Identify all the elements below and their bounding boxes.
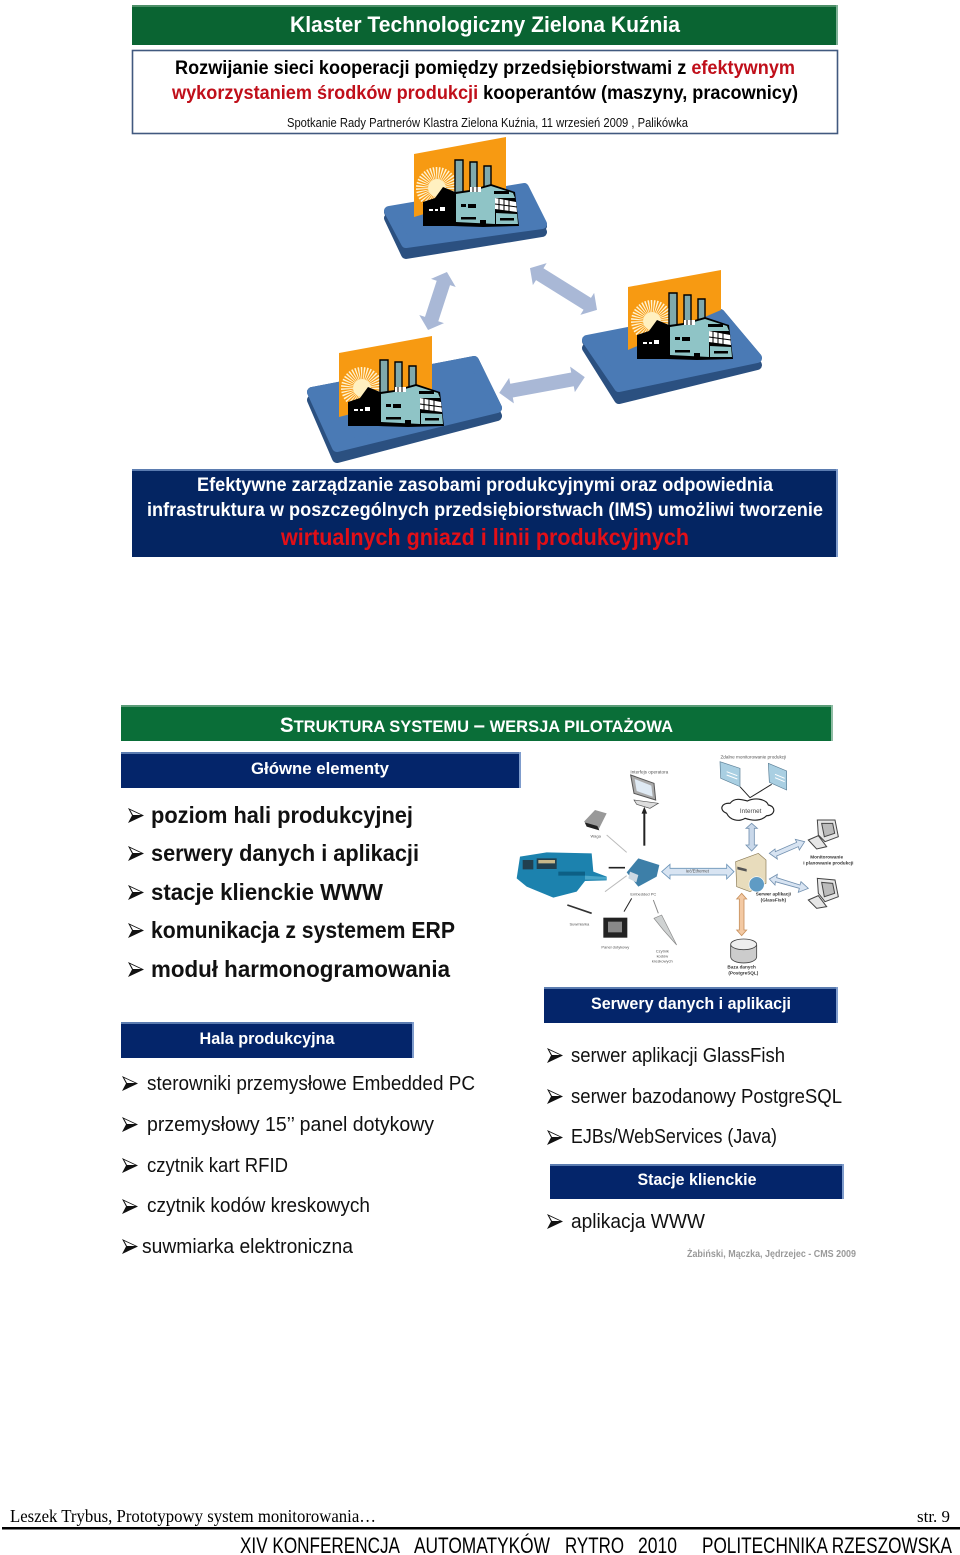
diagram labels: (GlassFish): [761, 898, 786, 903]
diagram labels: kreskowych: [652, 958, 673, 963]
list: main elements: stacje klienckie WWW: [151, 879, 384, 905]
database link: [737, 893, 747, 936]
diagram labels: Serwer aplikacji: [756, 891, 791, 896]
footer author: Leszek Trybus, Prototypowy system monitorowania…: [10, 1506, 376, 1526]
summary line 1: Efektywne zarządzanie zasobami produkcyjnymi oraz odpowiednia: [197, 474, 773, 496]
diagram labels: Panel dotykowy: [601, 944, 629, 949]
cloud: [722, 799, 774, 820]
list: servers: serwer aplikacji GlassFish: [571, 1045, 785, 1067]
list: client stations: aplikacja WWW: [571, 1211, 705, 1233]
diagram labels: kodów: [657, 953, 668, 958]
summary line 2: infrastruktura w poszczególnych przedsiębiorstwach (IMS) umożliwi tworzenie: [147, 499, 823, 521]
title bar: Klaster Technologiczny Zielona Kuźnia: [290, 12, 681, 37]
diagram labels: Czytnik: [656, 948, 669, 953]
diagram labels: Interfejs operatora: [630, 769, 669, 774]
factory node: right: [587, 270, 757, 399]
title bar: [132, 5, 838, 45]
list: production hall: czytnik kart RFID: [147, 1155, 288, 1177]
meeting note: Spotkanie Rady Partnerów Klastra Zielona Kuźnia, 11 wrzesień 2009 , Palikówka: [287, 116, 688, 130]
connectors: [605, 784, 772, 913]
intro text box: [132, 50, 838, 134]
operator monitor: [631, 775, 658, 808]
list: servers: [547, 1045, 842, 1148]
diagram labels: Waga: [591, 834, 602, 839]
intro line 1: Rozwijanie sieci kooperacji pomiędzy przedsiębiorstwami z efektywnym: [175, 57, 795, 79]
heading: production hall: [121, 1022, 414, 1058]
client computers: [808, 820, 838, 908]
heading: main elements: Główne elementy: [251, 759, 390, 778]
list: production hall: czytnik kodów kreskowych: [147, 1195, 370, 1217]
network link: Ieć/Ethernet: [686, 869, 710, 874]
system architecture diagram: [517, 754, 853, 975]
list: production hall: przemysłowy 15’’ panel dotykowy: [147, 1114, 434, 1136]
caliper: [567, 905, 592, 913]
diagram labels: [569, 754, 853, 975]
machine: [517, 852, 607, 898]
footer rule: [2, 1527, 960, 1530]
section heading bar: [121, 705, 833, 741]
list: main elements: [128, 802, 455, 982]
list: main elements: serwery danych i aplikacji: [151, 840, 419, 866]
heading: servers: [544, 987, 838, 1023]
touch panel: [603, 918, 627, 938]
footer page number: str. 9: [917, 1507, 950, 1526]
section heading bar: STRUKTURA SYSTEMU – WERSJA PILOTAŻOWA: [280, 714, 673, 737]
summary highlight: wirtualnych gniazd i linii produkcyjnych: [280, 524, 689, 550]
client link arrows: [769, 839, 805, 859]
heading: servers: Serwery danych i aplikacji: [591, 994, 791, 1013]
list: production hall: [122, 1073, 475, 1258]
factory node: left: [312, 336, 497, 458]
list: main elements: komunikacja z systemem ERP: [151, 917, 455, 943]
diagram labels: Suwmiarka: [569, 922, 590, 927]
database: [731, 939, 757, 963]
citation: Żabiński, Mączka, Jędrzejec - CMS 2009: [687, 1247, 856, 1260]
list: servers: EJBs/WebServices (Java): [571, 1126, 777, 1148]
diagram labels: Embedded PC: [630, 892, 656, 897]
footer conference line: [240, 1533, 952, 1555]
internet link: [746, 823, 757, 851]
embedded PC: [627, 858, 659, 887]
server: [736, 853, 766, 892]
diagram labels: i planowanie produkcji: [803, 860, 853, 865]
barcode reader: [654, 915, 677, 945]
list: main elements: moduł harmonogramowania: [151, 956, 451, 982]
intro line 2: wykorzystaniem środków produkcji kooperantów (maszyny, pracownicy): [171, 82, 798, 104]
list: production hall: suwmiarka elektroniczna: [142, 1236, 354, 1258]
list: servers: serwer bazodanowy PostgreSQL: [571, 1086, 842, 1108]
heading: client stations: Stacje klienckie: [638, 1170, 756, 1189]
diagram labels: (PostgreSQL): [728, 970, 759, 975]
arrow: left to right factory: [497, 364, 587, 406]
arrow: left to top factory: [416, 268, 459, 334]
heading: production hall: Hala produkcyjna: [200, 1029, 335, 1048]
list: production hall: sterowniki przemysłowe Embedded PC: [147, 1073, 475, 1095]
diagram: cooperating factories: [312, 137, 757, 458]
diagram labels: Baza danych: [727, 964, 756, 969]
heading: client stations: [550, 1164, 844, 1199]
summary panel: [132, 469, 838, 557]
network link: [662, 864, 734, 879]
factory node: top: [389, 137, 542, 254]
cloud: Internet: [740, 808, 762, 815]
arrow: top to right factory: [523, 257, 604, 321]
diagram labels: Zdalne monitorowanie produkcji: [720, 754, 786, 759]
scale icon: [584, 810, 607, 830]
heading: main elements: [121, 752, 521, 788]
diagram labels: Monitorowanie: [810, 854, 843, 859]
remote screens: [720, 762, 787, 790]
list: main elements: poziom hali produkcyjnej: [151, 802, 413, 828]
